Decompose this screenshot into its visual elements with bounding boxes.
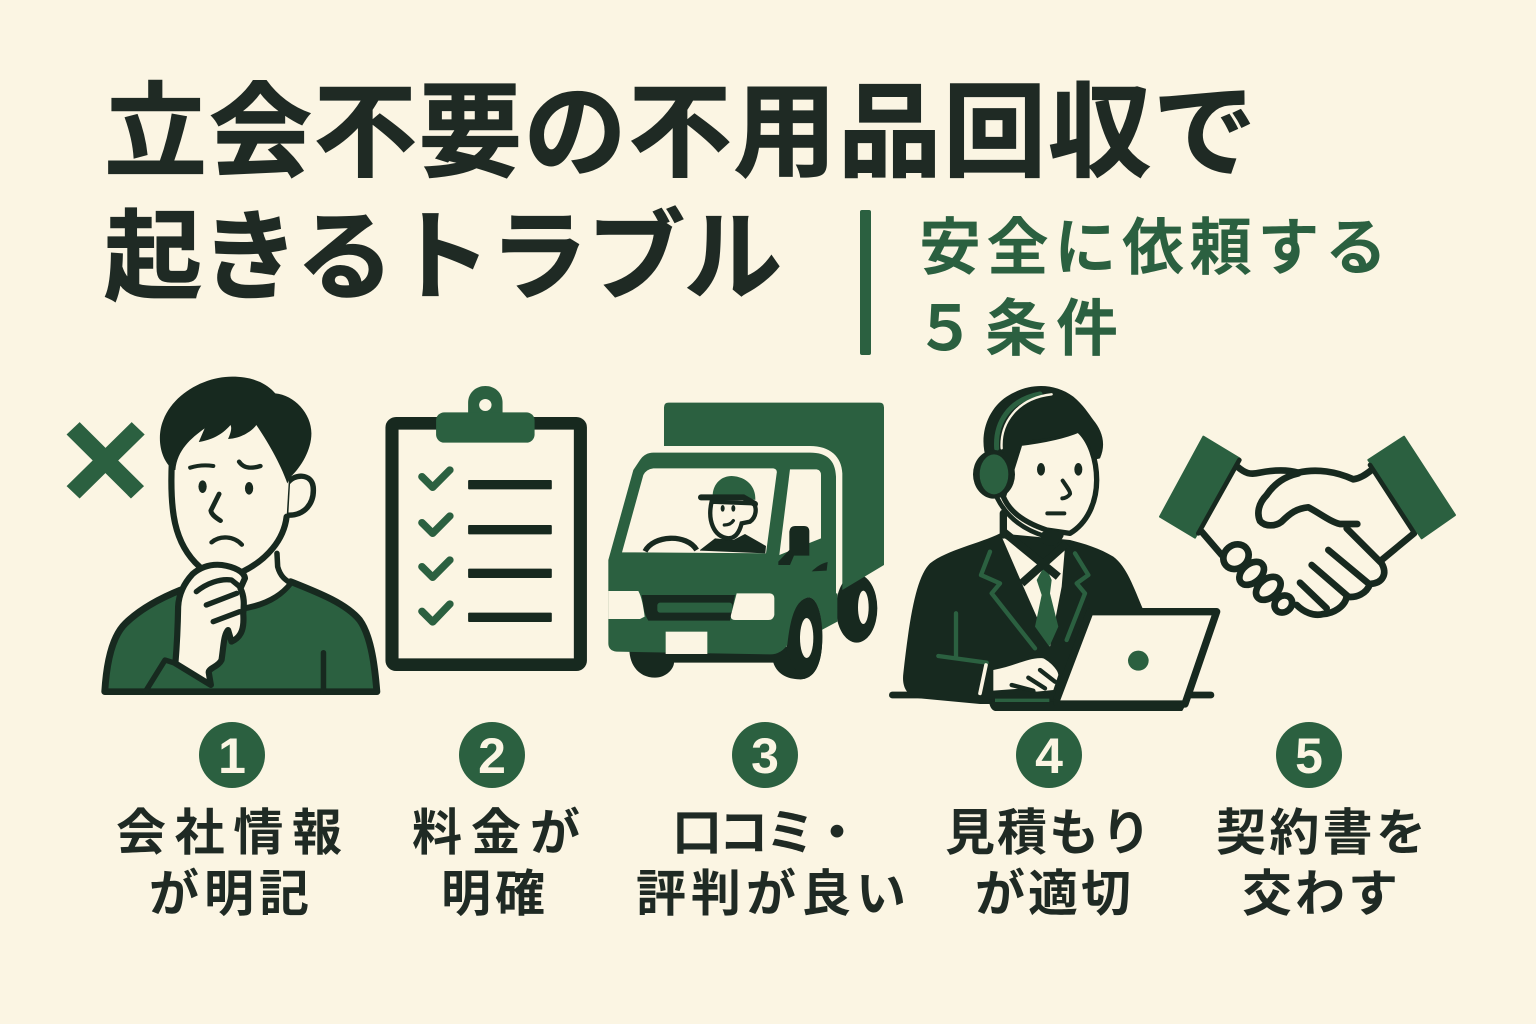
left cuff <box>1160 437 1239 538</box>
hair <box>983 386 1103 467</box>
features <box>1037 463 1045 476</box>
cab <box>608 453 837 654</box>
grille <box>642 595 735 621</box>
laptop <box>1055 612 1217 704</box>
number badge 5 <box>1276 722 1342 788</box>
icon: truck with driver <box>608 403 884 679</box>
title <box>104 75 1256 312</box>
label 3: 口コミ・ <box>672 805 862 861</box>
windshield <box>622 468 777 553</box>
mic <box>997 498 1047 537</box>
right headlight <box>731 593 774 620</box>
license plate <box>666 632 707 654</box>
subtitle: ５条件 <box>914 295 1118 364</box>
facial features <box>190 462 260 545</box>
icon: operator with headset and laptop <box>892 386 1217 710</box>
label 5: 交わす <box>1242 866 1398 922</box>
tie <box>1035 565 1058 647</box>
hands fill <box>1202 465 1413 613</box>
label 4 <box>945 805 1151 922</box>
title: 立会不要の不用品回収で <box>104 75 1256 190</box>
steering wheel <box>645 538 697 551</box>
number badge 4: 4 <box>1035 728 1063 784</box>
divider <box>860 210 871 355</box>
label 2 <box>412 805 580 922</box>
number badge 2: 2 <box>478 728 506 784</box>
label 5 <box>1216 805 1426 922</box>
lines <box>468 480 552 622</box>
icon: clipboard checklist <box>392 386 580 665</box>
neck line <box>992 513 1014 535</box>
number badge 1: 1 <box>218 728 246 784</box>
label 2: 明確 <box>441 866 545 922</box>
label 2: 料金が <box>412 805 580 861</box>
shirt <box>1002 537 1065 647</box>
subtitle <box>914 214 1387 364</box>
hair <box>160 377 311 483</box>
number badge 1 <box>199 722 265 788</box>
number badge 2 <box>459 722 525 788</box>
label 4: が適切 <box>975 866 1131 922</box>
rear wheel <box>836 574 877 643</box>
label 3: 評判が良い <box>636 866 906 922</box>
suit <box>903 533 1143 704</box>
left headlight <box>608 591 645 619</box>
label 1: 会社情報 <box>116 805 342 861</box>
title: 起きるトラブル <box>104 202 782 312</box>
icon: worried person <box>103 377 379 693</box>
icon: cross mark <box>73 428 138 492</box>
cargo box <box>664 403 884 590</box>
face <box>171 420 289 572</box>
headband <box>997 394 1040 448</box>
side mirror <box>778 526 809 565</box>
driver <box>700 476 766 553</box>
table line <box>892 685 1211 705</box>
number badge 5: 5 <box>1295 728 1323 784</box>
hand <box>993 658 1058 692</box>
label 3 <box>636 805 906 922</box>
sweater <box>105 582 377 692</box>
icon: handshake <box>1160 437 1455 616</box>
hand outlines <box>1202 467 1414 616</box>
label 1 <box>116 805 342 922</box>
hand <box>175 565 245 685</box>
front wheels <box>629 597 822 679</box>
side window <box>779 469 821 555</box>
neck <box>198 550 291 608</box>
label 5: 契約書を <box>1216 805 1426 861</box>
earcup <box>973 450 1015 499</box>
subtitle: 安全に依頼する <box>919 214 1387 283</box>
label 1: が明記 <box>149 866 309 922</box>
checks <box>422 470 450 622</box>
lapels <box>938 552 1088 663</box>
number badge 3: 3 <box>751 728 779 784</box>
right cuff <box>1368 437 1455 538</box>
clip <box>468 386 503 413</box>
ear <box>286 476 313 515</box>
number badge 3 <box>732 722 798 788</box>
face <box>1003 430 1097 533</box>
label 4: 見積もり <box>945 805 1151 861</box>
number badge 4 <box>1016 722 1082 788</box>
